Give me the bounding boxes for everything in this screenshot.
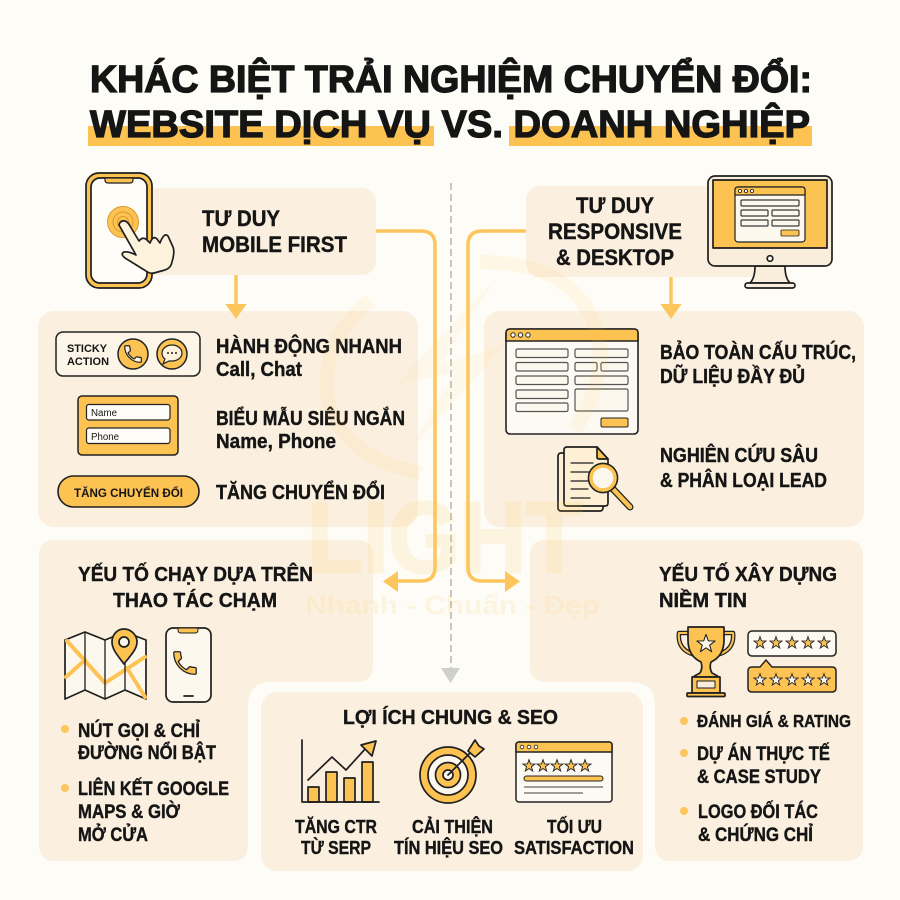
text: preserve structure xyxy=(660,340,856,388)
bullet: ratings: ĐÁNH GIÁ & RATING xyxy=(697,710,851,731)
bullet: call and directions: ĐƯỜNG NỔI BẬT xyxy=(78,742,216,764)
text: short form: Name, Phone xyxy=(216,431,336,453)
icon: trophy xyxy=(679,627,733,696)
heading text xyxy=(202,206,348,257)
button: conversion pill: TĂNG CHUYỂN ĐỔI xyxy=(74,485,183,500)
arrow: responsive to trust factors xyxy=(468,231,526,592)
text: quick actions xyxy=(216,334,402,381)
bullet: case study: DỰ ÁN THỰC TẾ xyxy=(697,743,830,765)
button: conversion pill xyxy=(58,476,199,507)
icon: folded map with pin xyxy=(65,629,146,699)
icon: target with arrow xyxy=(420,740,484,803)
heading text: TƯ DUY xyxy=(576,193,654,218)
bullet: partner logos: LOGO ĐỐI TÁC xyxy=(698,801,818,823)
arrow: desktop heading down xyxy=(660,277,682,319)
label: CTR xyxy=(295,816,377,858)
panel: desktop structure xyxy=(484,304,864,527)
label: CTR: TỪ SERP xyxy=(301,837,371,858)
bullet: case study: & CASE STUDY xyxy=(697,767,821,788)
icon: short form: Name xyxy=(91,408,117,419)
label: SEO signal xyxy=(394,816,503,858)
icon: sticky action bar: ACTION xyxy=(67,356,109,368)
label: SEO signal: TÍN HIỆU SEO xyxy=(394,837,503,858)
icon: desktop monitor xyxy=(708,176,832,288)
text: conversion: TĂNG CHUYỂN ĐỔI xyxy=(216,480,385,504)
text: deep research xyxy=(660,443,827,492)
heading: NIỀM TIN xyxy=(659,589,747,612)
icon: growth chart xyxy=(302,740,379,802)
heading: LỢI ÍCH CHUNG & SEO xyxy=(343,706,558,729)
heading text: RESPONSIVE xyxy=(548,219,682,244)
icon: documents with magnifier xyxy=(558,447,630,511)
text: short form xyxy=(216,406,405,453)
label: satisfaction: SATISFACTION xyxy=(514,838,634,858)
label: CTR: TĂNG CTR xyxy=(295,816,377,837)
text: quick actions: Call, Chat xyxy=(216,359,302,381)
panel: touch factors xyxy=(39,540,373,861)
bullet: google maps and hours: MAPS & GIỜ xyxy=(78,801,181,823)
heading xyxy=(78,562,313,612)
panel: mobile quick actions xyxy=(38,304,418,527)
icon: short form: Phone xyxy=(91,432,119,443)
bullet: partner logos xyxy=(680,801,818,846)
icon: yellow rating card xyxy=(748,660,836,692)
text: deep research: & PHÂN LOẠI LEAD xyxy=(660,468,827,492)
heading: THAO TÁC CHẠM xyxy=(113,589,277,612)
bullet: google maps and hours xyxy=(61,778,229,846)
icon: sticky action bar: STICKY xyxy=(67,343,108,355)
bullet: call and directions: NÚT GỌI & CHỈ xyxy=(78,720,200,742)
icon: short form xyxy=(78,396,178,455)
bullet: call and directions xyxy=(61,720,216,764)
text: short form: BIỂU MẪU SIÊU NGẮN xyxy=(216,406,405,430)
label: satisfaction: TỐI ƯU xyxy=(547,816,602,837)
panel: trust factors xyxy=(530,540,863,861)
icon: large desktop form window xyxy=(506,329,638,434)
icon: phone call xyxy=(166,628,211,702)
heading text: TƯ DUY xyxy=(202,206,280,231)
text: deep research: NGHIÊN CỨU SÂU xyxy=(660,443,818,467)
panel: responsive desktop heading xyxy=(526,176,832,288)
icon: white rating card xyxy=(748,631,836,656)
bullet: case study xyxy=(680,743,830,788)
icon: sticky action bar xyxy=(56,332,200,376)
heading text: & DESKTOP xyxy=(556,245,674,270)
bullet: google maps and hours: LIÊN KẾT GOOGLE xyxy=(78,778,229,800)
title: WEBSITE DỊCH VỤ VS. DOANH NGHIỆP xyxy=(90,102,810,146)
arrow: mobile heading down xyxy=(226,275,246,319)
text: preserve structure: BẢO TOÀN CẤU TRÚC, xyxy=(660,340,856,364)
bullet: partner logos: & CHỨNG CHỈ xyxy=(698,824,813,846)
panel: mobile first heading xyxy=(86,173,376,288)
text: quick actions: HÀNH ĐỘNG NHANH xyxy=(216,334,402,358)
heading: YẾU TỐ CHẠY DỰA TRÊN xyxy=(78,562,313,586)
heading: YẾU TỐ XÂY DỰNG xyxy=(659,562,837,586)
heading xyxy=(659,562,837,612)
center dashed divider arrow xyxy=(441,183,460,683)
panel: shared benefits and SEO xyxy=(261,692,643,871)
watermark: Light logo xyxy=(305,262,600,620)
text: preserve structure: DỮ LIỆU ĐẦY ĐỦ xyxy=(660,364,805,388)
icon: rated window xyxy=(516,742,612,802)
arrow: mobile first to touch factors xyxy=(376,231,435,592)
label: SEO signal: CẢI THIỆN xyxy=(412,816,493,837)
watermark: Light logo: Nhanh - Chuẩn - Đẹp xyxy=(305,590,600,620)
heading text: MOBILE FIRST xyxy=(202,232,348,257)
title: KHÁC BIỆT TRẢI NGHIỆM CHUYỂN ĐỔI: xyxy=(90,56,812,101)
icon: phone with tapping hand xyxy=(86,173,174,288)
label: satisfaction xyxy=(514,816,634,858)
title xyxy=(88,56,812,146)
watermark: Light logo: LIGHT xyxy=(307,482,582,594)
heading text xyxy=(548,193,682,270)
bullet: google maps and hours: MỞ CỬA xyxy=(78,824,148,846)
